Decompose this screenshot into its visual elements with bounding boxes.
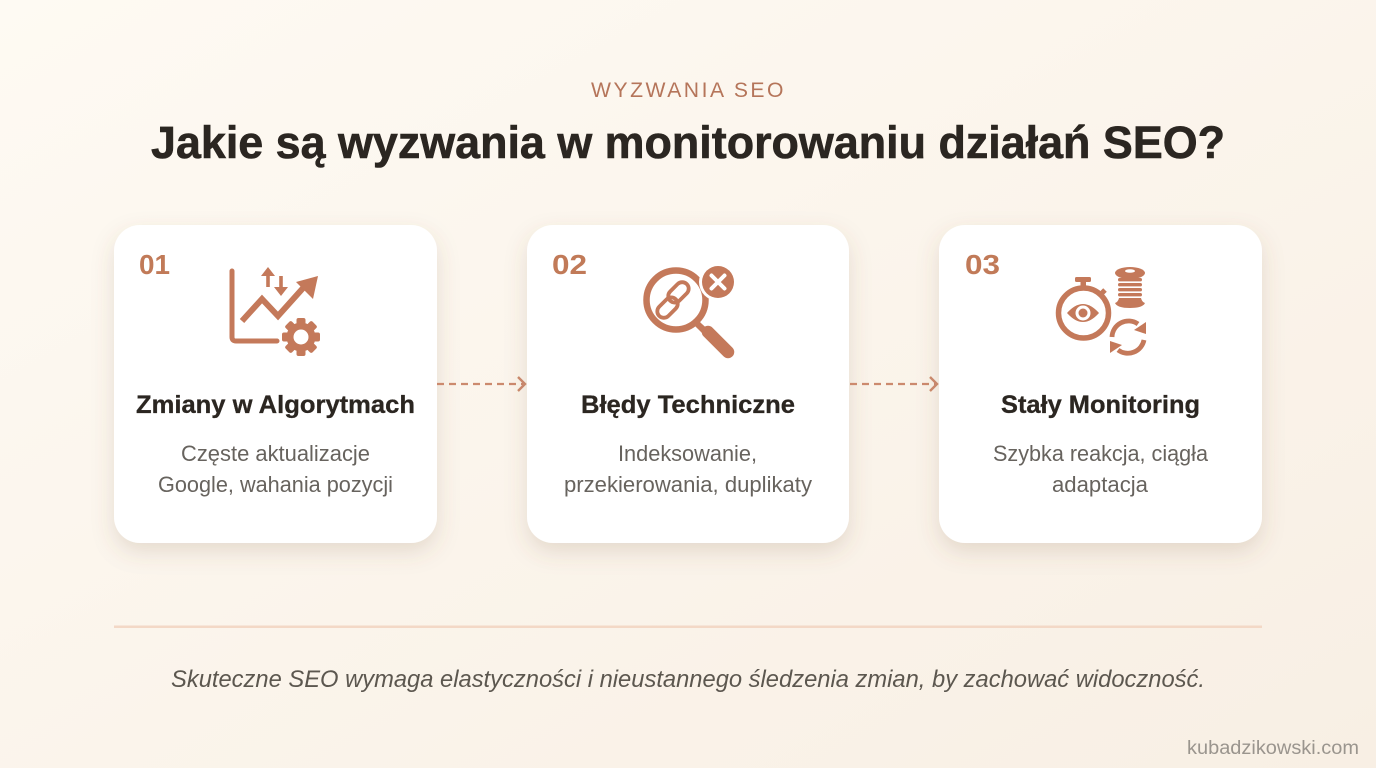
panel: card 1 [114, 225, 437, 543]
card 3 description: adaptacja [1052, 472, 1149, 497]
number 01: 01 [139, 249, 170, 280]
number 02: 02 [552, 249, 587, 280]
icon: magnifier with link and error badge [646, 263, 737, 352]
arrow: card 1 to card 2 [437, 377, 525, 391]
card 2 description: przekierowania, duplikaty [564, 472, 812, 497]
icon: chart with trend arrow and gear [232, 267, 320, 356]
card 1 description: Google, wahania pozycji [158, 472, 393, 497]
card 3 description [993, 441, 1209, 497]
closing statement: Skuteczne SEO wymaga elastyczności i nieustannego śledzenia zmian, by zachować widoczność. [171, 666, 1205, 693]
number 03: 03 [965, 249, 1000, 280]
card 3 heading: Stały Monitoring [1001, 391, 1200, 419]
title: Jakie są wyzwania w monitorowaniu działań SEO? [151, 117, 1225, 168]
icon: stopwatch with eye, spool and refresh arrows [1058, 267, 1146, 353]
card 1 description: Częste aktualizacje [181, 441, 370, 466]
card 1 heading: Zmiany w Algorytmach [136, 391, 415, 419]
panel: card 3 [939, 225, 1262, 543]
arrow: card 2 to card 3 [850, 377, 937, 391]
card 2 description: Indeksowanie, [618, 441, 757, 466]
card 1 description [158, 441, 393, 497]
watermark: kubadzikowski.com [1187, 738, 1359, 759]
card 2 description [564, 441, 812, 497]
eyebrow label: WYZWANIA SEO [591, 79, 786, 102]
card 2 heading: Błędy Techniczne [581, 391, 795, 419]
card 3 description: Szybka reakcja, ciągła [993, 441, 1209, 466]
panel: card 2 [527, 225, 849, 543]
